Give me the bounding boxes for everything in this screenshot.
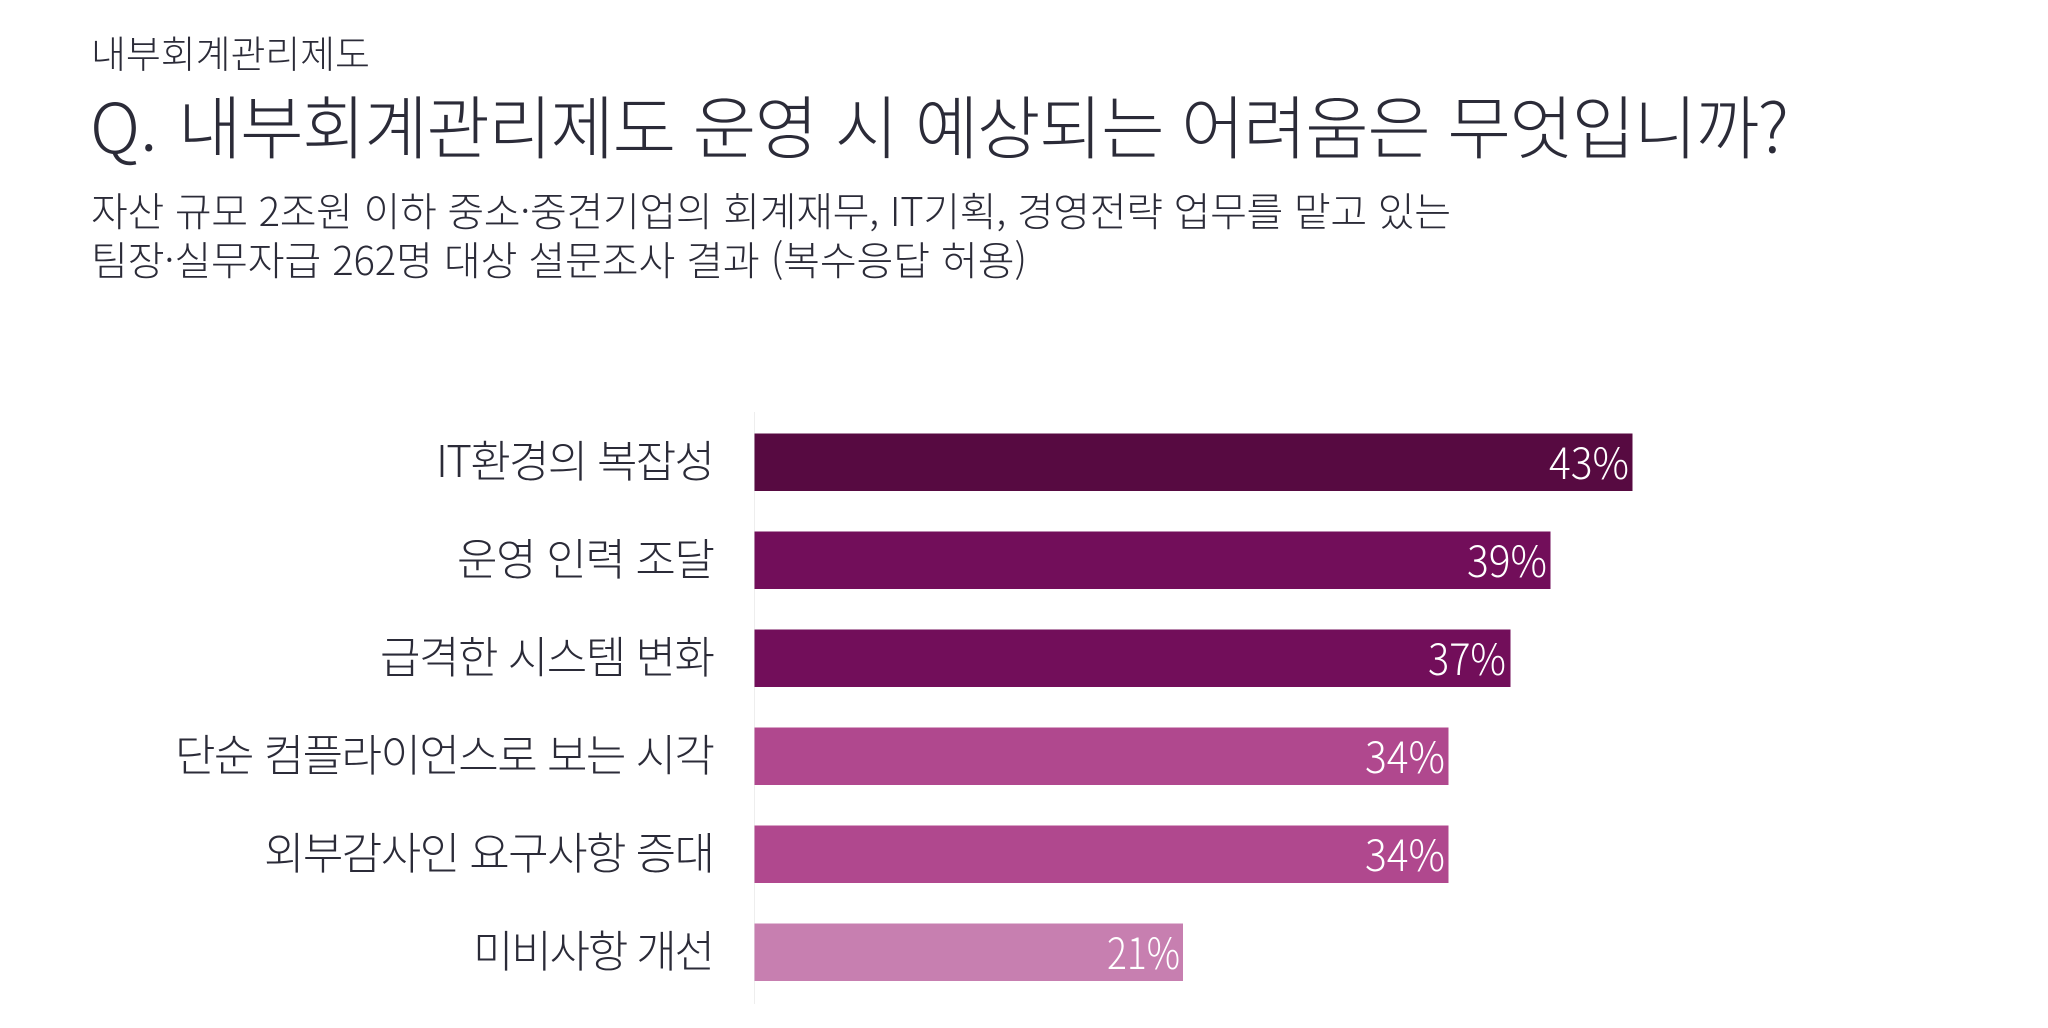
title question: 내부회계관리제도 운영 시 예상되는 어려움은 무엇입니까?	[178, 73, 1789, 173]
row: 미비사항 개선 21%: 21%	[1107, 920, 1180, 982]
row: 운영 인력 조달 39%: 39%	[1467, 528, 1547, 590]
row: 운영 인력 조달 39%: 운영 인력 조달	[457, 524, 715, 588]
row: IT환경의 복잡성 43%	[436, 426, 1632, 492]
row: 외부감사인 요구사항 증대 34%: 외부감사인 요구사항 증대	[264, 818, 715, 882]
row: 급격한 시스템 변화 37%	[380, 622, 1510, 688]
row: IT환경의 복잡성 43%: IT환경의 복잡성	[436, 426, 715, 490]
row: 급격한 시스템 변화 37%: 37%	[1428, 626, 1506, 688]
row: 단순 컴플라이언스로 보는 시각 34%: 단순 컴플라이언스로 보는 시각	[175, 720, 715, 784]
subtitle description: 팀장·실무자급 262명 대상 설문조사 결과 (복수응답 허용)	[91, 229, 1027, 287]
row: 급격한 시스템 변화 37%: 급격한 시스템 변화	[380, 622, 715, 686]
row: 미비사항 개선 21%	[473, 916, 1183, 982]
row: 외부감사인 요구사항 증대 34%	[264, 818, 1448, 884]
row: 단순 컴플라이언스로 보는 시각 34%: 34%	[1365, 724, 1445, 786]
row: 단순 컴플라이언스로 보는 시각 34%	[175, 720, 1448, 786]
row: 미비사항 개선 21%: 미비사항 개선	[473, 916, 715, 980]
row: 외부감사인 요구사항 증대 34%: 34%	[1365, 822, 1445, 884]
subtitle description	[91, 180, 1451, 287]
title question: Q.	[90, 73, 157, 173]
row: 운영 인력 조달 39%	[457, 524, 1550, 590]
row: IT환경의 복잡성 43%: 43%	[1549, 430, 1629, 492]
subtitle description: 자산 규모 2조원 이하 중소·중견기업의 회계재무, IT기획, 경영전략 업무를 맡고 있는	[91, 180, 1451, 238]
bar chart	[175, 412, 1632, 1004]
kicker heading: 내부회계관리제도	[91, 24, 370, 79]
